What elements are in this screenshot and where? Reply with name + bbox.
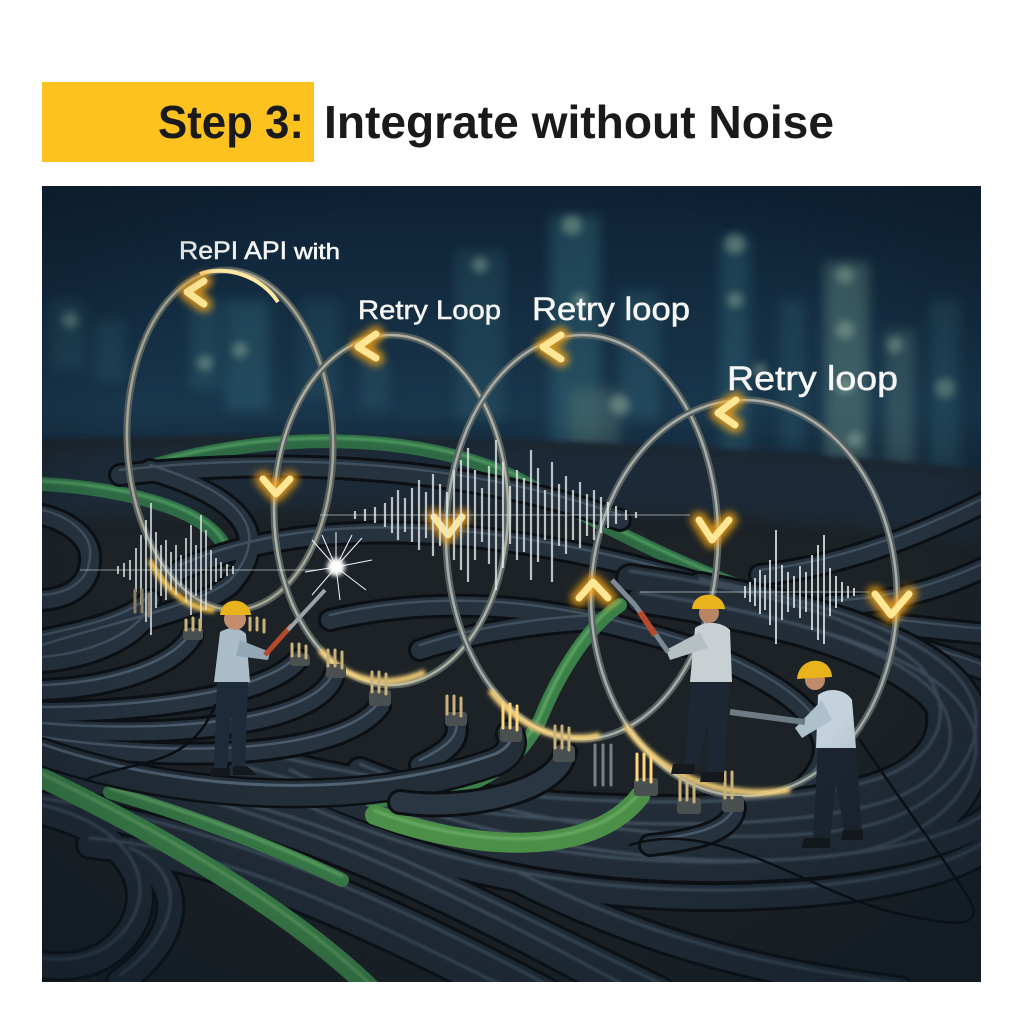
chevron glows (187, 281, 909, 615)
worker 3 tool (730, 712, 805, 722)
ring labels (179, 237, 898, 398)
worker 2 legs (684, 678, 730, 775)
waveform 3 (640, 530, 870, 644)
ring 1 (121, 267, 339, 613)
cables (22, 438, 990, 1024)
worker 1 tool (265, 625, 292, 655)
connector collars (183, 628, 744, 814)
worker 2 boots (671, 764, 724, 782)
worker 1 head (224, 615, 246, 630)
far dark cables (42, 461, 990, 790)
worker 3 head (805, 670, 825, 690)
worker 3 hard hat (797, 661, 832, 679)
label: with: with (293, 239, 340, 264)
worker 1 hard hat (220, 601, 251, 615)
chevron cores (187, 281, 909, 615)
yellow title block (42, 82, 314, 162)
ring 4 stroke (591, 400, 897, 796)
connector prongs (135, 590, 732, 802)
worker 3 shirt (816, 690, 856, 748)
worker 3 (730, 661, 863, 848)
worker 3 boots (802, 830, 863, 848)
spark burst (305, 532, 372, 600)
ring 4 (591, 400, 897, 796)
worker 2 (612, 580, 732, 782)
label: Retry Loop: Retry Loop (358, 295, 501, 325)
title text: Integrate without Noise (324, 96, 834, 148)
panel background (42, 186, 981, 982)
panel: illustration (22, 186, 990, 1024)
ground (42, 435, 980, 662)
step label: Step 3: (158, 96, 304, 148)
label: RePI API: RePI API (179, 237, 287, 265)
ring 2 stroke (274, 335, 508, 685)
worker 2 head (699, 603, 719, 623)
ring 1 stroke (121, 267, 339, 613)
worker 1 legs (214, 680, 248, 770)
panel vignette (42, 186, 981, 982)
worker 1 shirt (214, 628, 250, 682)
near dark cables (42, 563, 981, 982)
waveform 1 (80, 503, 318, 635)
worker 1 boots (210, 766, 257, 776)
left bundle cables (42, 631, 735, 845)
title banner (42, 82, 834, 162)
ring 3 (446, 335, 718, 739)
label: Retry loop 2: Retry loop (532, 291, 690, 327)
cable connectors (135, 590, 744, 814)
worker 1 (210, 590, 325, 776)
waveform 2 (320, 440, 690, 590)
ring 2 (274, 335, 508, 685)
green cables, front (42, 778, 372, 990)
power lead (85, 705, 974, 923)
worker 3 legs (813, 745, 862, 840)
worker 2 tool (612, 580, 668, 652)
glowing arrow chevrons (187, 281, 909, 615)
worker 2 shirt (690, 623, 732, 682)
ring 3 stroke (446, 335, 718, 739)
blurred city lights (50, 215, 960, 480)
worker 2 hard hat (692, 595, 725, 609)
label: Retry loop 3: Retry loop (727, 360, 898, 398)
main cable (42, 726, 565, 804)
green cables, back (42, 441, 750, 590)
